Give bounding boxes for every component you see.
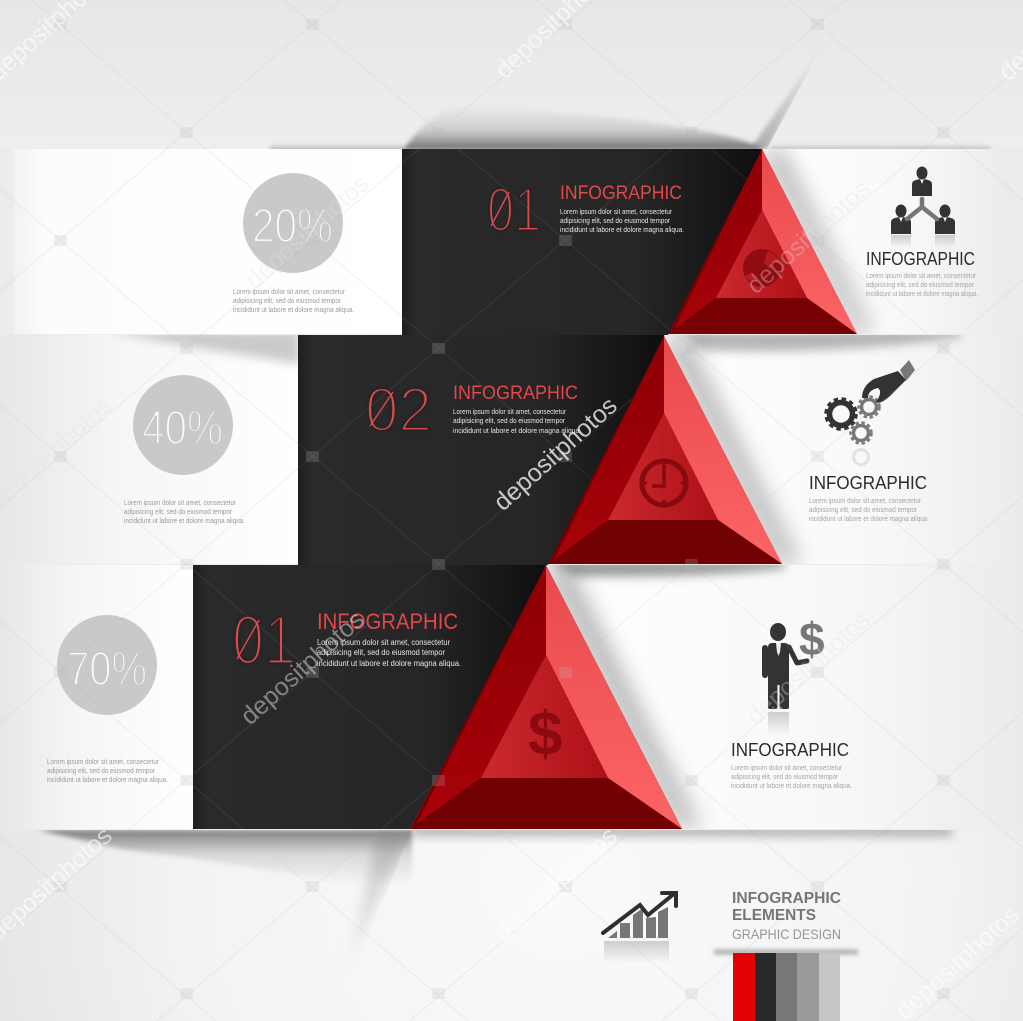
text block [731,765,852,790]
text block: adipisicing elit, sed do eiusmod tempor [560,216,671,225]
bottom shadow and paper fold [40,830,956,934]
text block: adipisicing elit, sed do eiusmod tempor [233,298,342,305]
icon: dollar: $ [528,700,562,769]
heading: INFOGRAPHIC [317,609,458,634]
heading: INFOGRAPHIC [453,383,578,404]
panel: row 2 left [98,335,298,564]
text block [47,759,168,784]
progress circle 20%: 20% [252,200,333,253]
text block: incididunt ut labore et dolore magna aliqua. [124,518,245,525]
panel: row 1 left [14,149,403,334]
text block: Lorem ipsum dolor sit amet, consectetur [453,407,567,416]
icon: growth chart [603,893,676,963]
text block: Lorem ipsum dolor sit amet, consectetur [124,500,237,507]
colour stripes tab [714,950,858,1021]
icon: team [891,166,955,248]
text block [317,638,461,668]
text block: incididunt ut labore et dolore magna aliqua. [317,659,461,668]
text block [809,498,929,523]
text block: incididunt ut labore et dolore magna aliqua. [731,783,852,790]
icon: clock [642,461,686,505]
heading: infographic elements: ELEMENTS [732,907,816,924]
text block: incididunt ut labore et dolore magna aliqua. [453,426,581,435]
text block: adipisicing elit, sed do eiusmod tempor [809,507,918,514]
watermarks: depositphotos [488,821,623,946]
text block: adipisicing elit, sed do eiusmod tempor [453,416,566,425]
heading: INFOGRAPHIC [809,472,927,493]
text block: Lorem ipsum dolor sit amet, consectetur [809,498,922,505]
icon: businessman with dollar [765,613,825,736]
number 01: 01 [487,176,541,245]
panel: row 3 dark [193,565,547,829]
heading: INFOGRAPHIC [731,739,849,760]
heading: infographic elements: INFOGRAPHIC [732,890,841,907]
panel: row 2 right [664,335,962,564]
text block: adipisicing elit, sed do eiusmod tempor [866,282,975,289]
number 01: 01 [232,601,296,679]
text block: incididunt ut labore et dolore magna aliqua. [866,291,978,298]
text block: incididunt ut labore et dolore magna aliqua. [233,307,354,314]
heading: INFOGRAPHIC [866,249,975,269]
panel: row 1 right [762,149,978,334]
progress circle 70%: 70% [67,643,147,696]
text block: Lorem ipsum dolor sit amet, consectetur [731,765,843,772]
panel: row 1 dark [402,149,763,335]
text block [124,500,245,525]
text block: Lorem ipsum dolor sit amet, consectetur [866,273,977,280]
panel: row 2 dark [298,335,665,565]
watermarks: depositphotos [488,391,623,516]
text block: incididunt ut labore et dolore magna aliqua. [809,516,929,523]
triangle 3 with dollar icon [410,565,682,829]
background: top area [0,0,1023,149]
text block [453,407,581,435]
panel: row 3 left [0,565,194,829]
number 02: 02 [365,376,432,445]
text block: incididunt ut labore et dolore magna aliqua. [560,225,684,234]
progress circle 70% [57,615,157,715]
watermarks: depositphotos [240,169,375,294]
watermarks: depositphotos [235,605,370,730]
top shadow and paper fold [268,69,992,149]
text block: adipisicing elit, sed do eiusmod tempor [317,648,445,657]
triangle 2 with clock icon [548,336,782,564]
text block: adipisicing elit, sed do eiusmod tempor [47,768,156,775]
progress circle 40% [133,375,233,475]
text block: Lorem ipsum dolor sit amet, consectetur [317,638,450,647]
text block [560,207,684,234]
progress circle 40%: 40% [142,402,223,455]
heading: infographic elements: GRAPHIC DESIGN [732,926,841,942]
watermarks: depositphotos [741,605,876,730]
icon: businessman with dollar: $ [799,613,825,665]
progress circle 20% [243,173,343,273]
text block: adipisicing elit, sed do eiusmod tempor [731,774,839,781]
triangle 1 with globe icon [668,149,857,334]
text block: Lorem ipsum dolor sit amet, consectetur [233,289,346,296]
icon: hand with gears [826,360,915,464]
panel: row 3 right [546,565,899,829]
text block: Lorem ipsum dolor sit amet, consectetur [47,759,160,766]
icon: globe [743,249,781,287]
heading: infographic elements [732,890,841,942]
text block: incididunt ut labore et dolore magna aliqua. [47,777,168,784]
heading: INFOGRAPHIC [560,183,682,204]
text block: adipisicing elit, sed do eiusmod tempor [124,509,233,516]
background: bottom area [0,830,1023,1021]
text block: Lorem ipsum dolor sit amet, consectetur [560,207,673,216]
text block [866,273,978,298]
text block [233,289,354,314]
watermarks: depositphotos [741,174,876,299]
